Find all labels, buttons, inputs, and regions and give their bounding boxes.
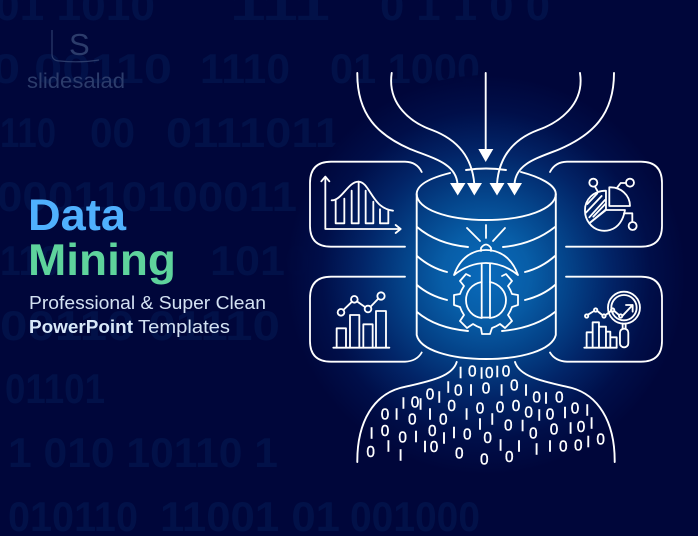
title: Data Mining xyxy=(28,191,176,285)
binary data digits: 0 xyxy=(524,405,533,422)
binary data digits: I xyxy=(569,421,573,438)
background binary digits: 000110100011 xyxy=(0,173,297,220)
binary data digits: 0 xyxy=(512,398,520,415)
arrows: five inflow arrows xyxy=(357,73,614,196)
binary data digits: I xyxy=(535,442,539,459)
binary data digits: I xyxy=(480,366,484,383)
binary data digits: 0 xyxy=(496,400,504,417)
binary data digits: 0 xyxy=(426,387,434,404)
background binary digits: 00110 01110 xyxy=(0,302,280,349)
binary data digits: I xyxy=(548,438,552,455)
binary data digits: I xyxy=(544,391,548,408)
panel: bottom left frame xyxy=(310,277,422,362)
central blue glow xyxy=(286,75,686,475)
binary data digits: 0 xyxy=(476,400,484,417)
binary data digits: 0 xyxy=(428,423,437,440)
binary data digits: 0 xyxy=(559,438,568,455)
binary data digits: 0 xyxy=(381,423,389,440)
binary data digits: I xyxy=(370,426,374,443)
binary data digits: I xyxy=(437,390,441,407)
binary data digits: I xyxy=(395,406,399,423)
binary data digits: I xyxy=(586,434,590,451)
binary data digits: I xyxy=(590,416,594,433)
background binary digits: 110 xyxy=(0,237,60,284)
binary data digits: 0 xyxy=(483,430,492,447)
binary data digits: 0 xyxy=(574,437,583,454)
binary data digits: 0 xyxy=(482,381,490,398)
binary data digits: I xyxy=(452,425,456,442)
binary data digits: 0 xyxy=(546,406,554,423)
binary data digits: I xyxy=(469,382,473,399)
binary data digits: 0 xyxy=(529,426,538,443)
binary data digits: I xyxy=(399,447,403,464)
binary data digits: I xyxy=(585,402,589,419)
binary data digits: I xyxy=(442,431,446,448)
binary data digits: I xyxy=(537,407,541,424)
binary data digits: 0 xyxy=(430,439,438,456)
binary data digits: I xyxy=(517,438,521,455)
binary data digits xyxy=(366,363,605,468)
logo: slidesalad: S xyxy=(69,27,90,62)
binary data digits: 0 xyxy=(555,390,564,407)
panel: bottom right frame xyxy=(550,277,662,362)
binary data digits: I xyxy=(524,382,528,399)
binary data digits: 0 xyxy=(596,431,605,448)
subtitle xyxy=(29,292,266,337)
background binary digits xyxy=(0,0,550,536)
background binary digits: 01101 xyxy=(5,365,105,412)
binary data digits: 0 xyxy=(455,446,464,463)
icon: bar chart with line xyxy=(333,292,389,348)
binary data digits: 0 xyxy=(510,377,519,394)
background binary digits: 01 1000 xyxy=(330,45,480,92)
binary data digits: 0 xyxy=(571,401,579,418)
binary data digits: I xyxy=(563,405,567,422)
binary data digits: 0 xyxy=(408,411,417,428)
binary data digits: 0 xyxy=(504,417,513,434)
icon: magnified chart xyxy=(584,292,640,348)
binary data digits: I xyxy=(521,418,525,435)
binary data digits: 0 xyxy=(447,398,456,415)
icon: pickaxe and gear xyxy=(454,225,518,334)
logo: slidesalad: slidesalad xyxy=(27,69,125,93)
panel: top left frame xyxy=(310,162,422,247)
subtitle: Templates xyxy=(138,316,230,337)
binary data digits: 0 xyxy=(505,449,514,466)
binary data digits: I xyxy=(478,416,482,433)
binary data digits: 0 xyxy=(439,411,448,428)
body outline: data outflow xyxy=(357,362,615,462)
icon: database cylinder xyxy=(417,168,556,359)
binary data digits: I xyxy=(419,397,423,414)
binary data digits: 0 xyxy=(485,365,494,382)
binary data digits: I xyxy=(490,411,494,428)
binary data digits: 0 xyxy=(381,406,389,423)
background binary digits: 0111011 xyxy=(166,109,341,156)
background binary digits: 1010 xyxy=(210,237,310,284)
binary data digits: 0 xyxy=(463,426,472,443)
binary data digits: 0 xyxy=(411,395,419,412)
binary data digits: 0 xyxy=(532,390,541,407)
background binary digits: 1110 xyxy=(200,45,290,92)
binary data digits: I xyxy=(446,380,450,397)
title: Data Mining: Mining xyxy=(28,236,176,285)
icon: bell curve histogram xyxy=(321,177,401,233)
binary data digits: 0 xyxy=(398,430,407,447)
subtitle: Professional & Super Clean xyxy=(29,292,266,313)
title: Data Mining: Data xyxy=(28,191,127,240)
binary data digits: 0 xyxy=(502,363,510,380)
subtitle: PowerPoint xyxy=(29,316,133,337)
binary data digits: 0 xyxy=(454,382,463,399)
binary data digits: 0 xyxy=(366,444,375,461)
binary data digits: I xyxy=(428,406,432,423)
logo: slidesalad xyxy=(27,27,125,93)
binary data digits: 0 xyxy=(480,451,489,468)
background binary digits: 00 xyxy=(90,109,135,156)
binary data digits: 0 xyxy=(468,363,477,380)
binary data digits: I xyxy=(423,439,427,456)
binary data digits: I xyxy=(495,364,499,381)
icon: pie chart xyxy=(585,179,637,231)
binary data digits: I xyxy=(459,365,463,382)
binary data digits: 0 xyxy=(577,419,585,436)
background binary digits: 1 010 10110 1 xyxy=(8,429,278,476)
binary data digits: I xyxy=(401,396,405,413)
binary data digits: 0 xyxy=(550,421,558,438)
background binary digits: 110 xyxy=(0,109,56,156)
binary data digits: I xyxy=(500,382,504,399)
binary data digits: I xyxy=(499,437,503,454)
binary data digits: I xyxy=(386,438,390,455)
panel: top right frame xyxy=(550,162,662,247)
binary data digits: I xyxy=(465,406,469,423)
binary data digits: I xyxy=(414,429,418,446)
